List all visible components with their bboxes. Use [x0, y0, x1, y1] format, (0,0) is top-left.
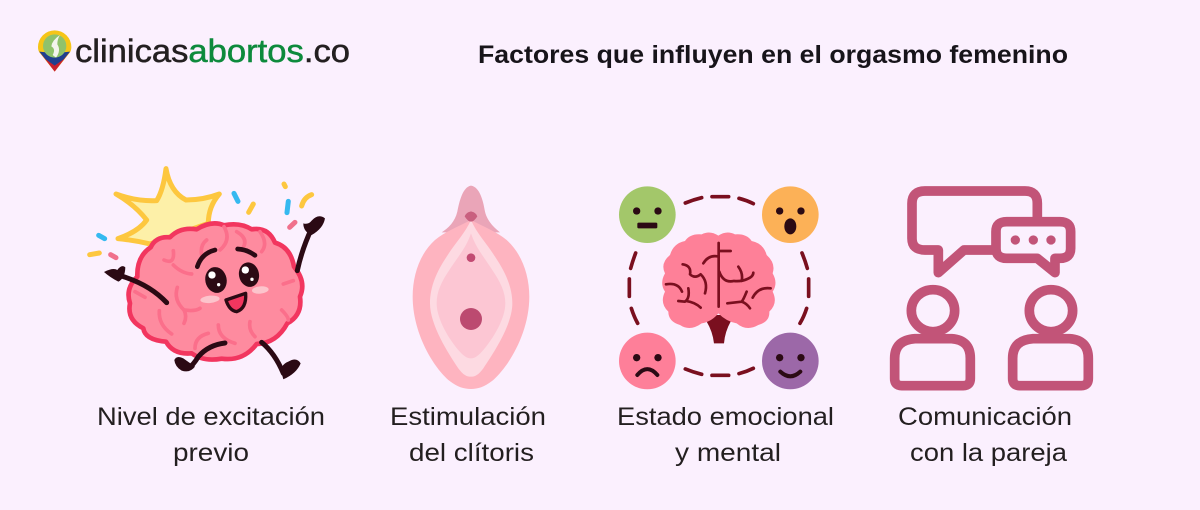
dots — [1011, 235, 1056, 245]
brain folds — [135, 227, 293, 348]
label: y mental — [675, 439, 781, 467]
icon: vulva diagram — [413, 186, 529, 389]
logo wordmark: clinicas abortos .co — [75, 33, 350, 69]
icon: happy brain — [90, 169, 325, 379]
dashed ring — [629, 197, 809, 375]
brain stem — [707, 315, 731, 343]
brain folds — [666, 243, 771, 308]
label — [97, 403, 325, 467]
arms and legs — [123, 228, 312, 373]
icon: map pin logo — [38, 30, 71, 72]
icon: yellow burst — [116, 169, 219, 244]
label: previo — [173, 439, 249, 467]
icon: people talking — [895, 191, 1088, 386]
emoji: neutral — [619, 186, 676, 243]
person left — [895, 290, 970, 386]
panel: clitoris — [390, 186, 546, 467]
icon: confetti — [90, 184, 312, 258]
panel: excitement — [90, 169, 325, 467]
brain — [662, 232, 775, 328]
emoji: sad — [619, 333, 676, 389]
label: Nivel de excitación — [97, 403, 325, 431]
emoji: happy — [762, 333, 819, 389]
logo — [38, 30, 350, 72]
label: Comunicación — [898, 403, 1072, 431]
label: del clítoris — [409, 439, 534, 467]
icon: emotions around brain — [619, 186, 819, 389]
panel: emotional state — [617, 186, 834, 467]
brain body — [129, 223, 302, 360]
label: Estimulación — [390, 403, 546, 431]
label — [617, 403, 834, 467]
label: Estado emocional — [617, 403, 834, 431]
emoji: surprised — [762, 186, 819, 243]
speech bubble small — [996, 222, 1071, 273]
speech bubble large — [912, 191, 1037, 273]
face — [197, 249, 269, 312]
person right — [1013, 290, 1088, 386]
label: con la pareja — [910, 439, 1067, 467]
title: Factores que influyen en el orgasmo femenino — [478, 41, 1068, 69]
label — [898, 403, 1072, 467]
panel: communication — [895, 191, 1088, 467]
label — [390, 403, 546, 467]
